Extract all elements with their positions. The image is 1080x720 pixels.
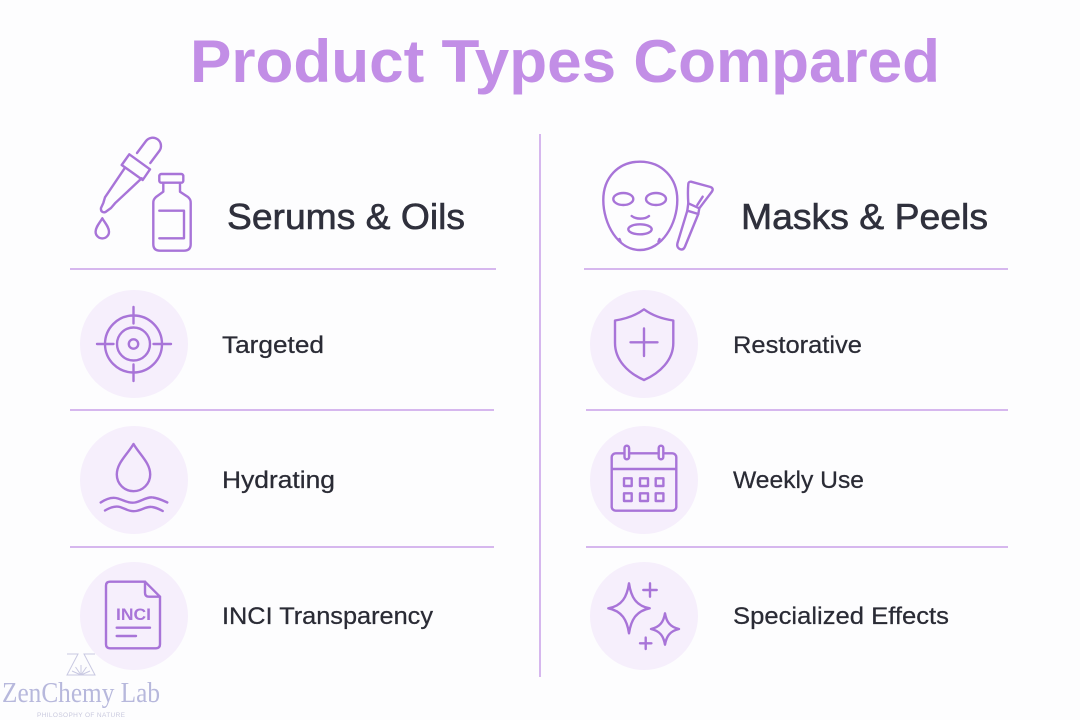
icon: logo flask	[67, 654, 95, 675]
center divider	[539, 134, 541, 677]
label: targeted: Targeted	[222, 332, 324, 359]
logo: zenchemy lab	[2, 654, 160, 719]
label: specialized effects: Specialized Effects	[733, 603, 949, 630]
panel: serums and oils	[70, 138, 496, 670]
logo tagline: PHILOSOPHY OF NATURE	[37, 712, 126, 719]
icon: face mask and brush	[603, 162, 713, 250]
icon: sparkles	[590, 562, 698, 670]
icon: dropper and bottle	[96, 138, 191, 251]
row: hydrating	[80, 426, 335, 534]
label: restorative: Restorative	[733, 332, 862, 359]
label: weekly use: Weekly Use	[733, 467, 864, 494]
icon: inci document	[80, 562, 188, 670]
icon: shield	[590, 290, 698, 398]
icon: target	[80, 290, 188, 398]
heading: serums and oils: Serums & Oils	[227, 196, 465, 237]
title: Product Types Compared	[190, 28, 940, 95]
panel: masks and peels	[584, 162, 1008, 670]
row: restorative	[590, 290, 862, 398]
row: targeted	[80, 290, 324, 398]
row: weekly use	[590, 426, 864, 534]
heading: masks and peels: Masks & Peels	[741, 196, 988, 237]
icon: calendar	[590, 426, 698, 534]
row: specialized effects	[590, 562, 949, 670]
icon: inci document: INCI	[116, 605, 151, 624]
row: inci transparency	[80, 562, 434, 670]
icon: water drop	[80, 426, 188, 534]
logo wordmark: ZenChemy Lab	[2, 678, 160, 709]
label: inci transparency: INCI Transparency	[222, 603, 434, 630]
label: hydrating: Hydrating	[222, 467, 335, 494]
